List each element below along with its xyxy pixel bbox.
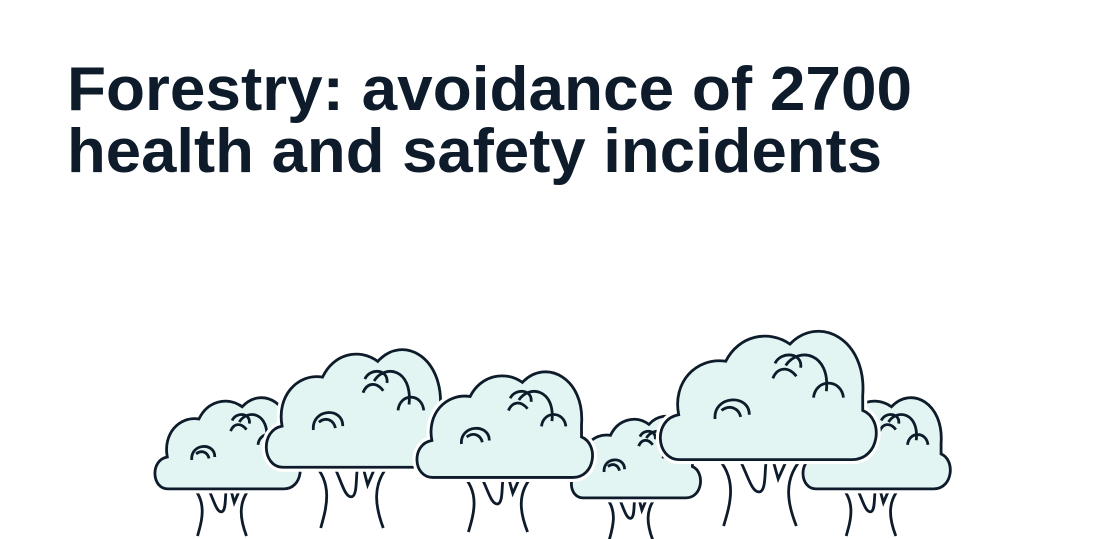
illustration: trees [155, 331, 950, 539]
tree 1 [155, 398, 300, 536]
tree 2 [266, 350, 452, 528]
tree 5 [660, 331, 876, 526]
tree 4 [571, 416, 701, 539]
title: Forestry: avoidance of 2700 [67, 55, 912, 124]
tree 6 [803, 398, 950, 536]
title [67, 55, 912, 186]
title: health and safety incidents [67, 117, 882, 186]
tree 3 [417, 372, 593, 532]
